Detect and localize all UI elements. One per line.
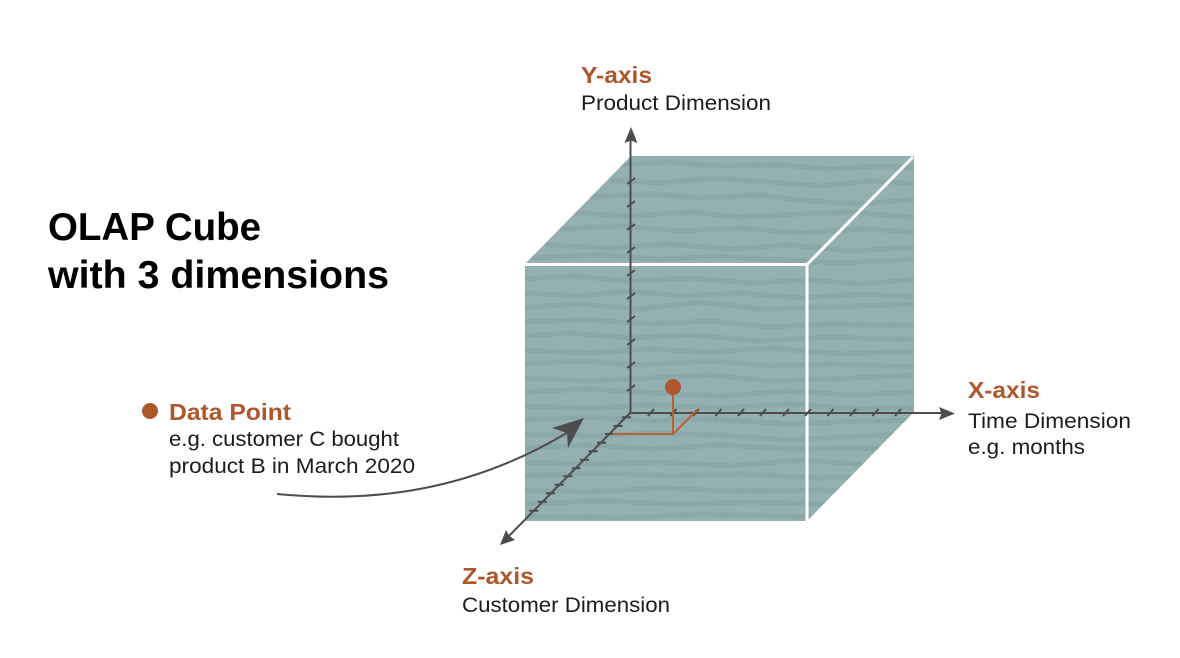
data point legend: e.g. customer C bought <box>169 428 399 451</box>
data point legend <box>142 399 415 478</box>
x axis label: e.g. months <box>968 436 1085 459</box>
x axis <box>630 407 955 420</box>
z axis label <box>462 563 670 617</box>
data point legend: product B in March 2020 <box>169 455 415 478</box>
x axis label <box>968 377 1131 459</box>
y axis label: Y-axis <box>581 62 652 88</box>
z axis label: Customer Dimension <box>462 594 670 617</box>
y axis <box>624 127 638 413</box>
x axis label: X-axis <box>968 377 1040 403</box>
cube white edges <box>525 157 913 521</box>
x axis label: Time Dimension <box>968 410 1131 433</box>
title: OLAP Cube <box>48 206 261 249</box>
cube body with textured faces <box>520 150 920 525</box>
title <box>47 206 389 297</box>
z axis label: Z-axis <box>462 563 534 589</box>
cube <box>520 150 920 525</box>
arrow: data point callout <box>277 418 584 497</box>
title: with 3 dimensions <box>47 254 389 297</box>
data point legend: Data Point <box>169 399 291 425</box>
y axis label <box>581 62 771 115</box>
y axis label: Product Dimension <box>581 92 771 115</box>
z axis <box>500 413 631 545</box>
data point marker in cube <box>613 379 698 434</box>
